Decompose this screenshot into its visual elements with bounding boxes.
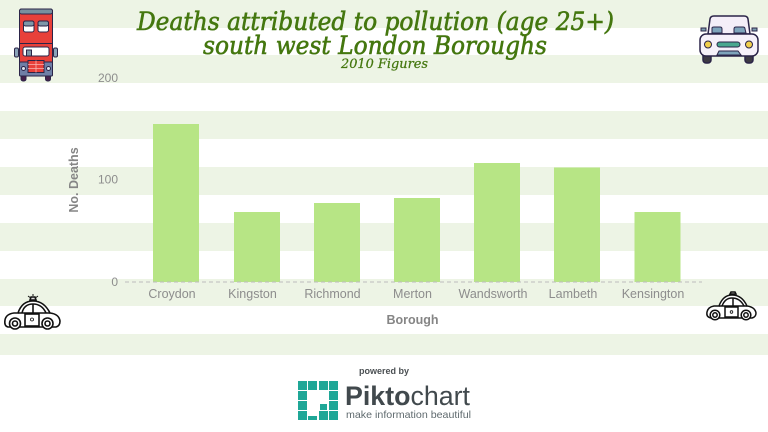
x axis category labels: Kingston [228,287,277,301]
title: south west London Boroughs [203,31,547,60]
title: Deaths attributed to pollution (age 25+) [136,7,614,36]
icon: police car right [707,292,756,320]
y axis title: No. Deaths [67,147,81,213]
icon: Piktochart mark [298,381,338,420]
x axis category labels: Merton [393,287,432,301]
tagline: make information beautiful [346,409,471,421]
bar chart [67,71,702,327]
bars [153,124,680,282]
Piktochart logo [298,381,471,421]
y axis tick labels: 0 [111,275,118,289]
icon: front view car [700,16,758,63]
y axis tick labels: 100 [98,172,118,186]
x axis category labels: Croydon [148,287,196,301]
x axis category labels: Kensington [622,287,684,301]
x axis category labels [148,287,684,301]
logotype: Piktochart [345,381,470,411]
icon: double-decker bus [14,9,58,81]
x axis category labels: Wandsworth [458,287,528,301]
title [136,7,614,60]
powered by label: powered by [359,366,410,377]
x axis title: Borough [386,313,439,327]
y axis tick labels [98,71,118,289]
icon: police car left [5,294,60,329]
x axis category labels: Lambeth [549,287,597,301]
y axis tick labels: 200 [98,71,118,85]
subtitle: 2010 Figures [340,57,428,72]
x axis category labels: Richmond [304,287,361,301]
